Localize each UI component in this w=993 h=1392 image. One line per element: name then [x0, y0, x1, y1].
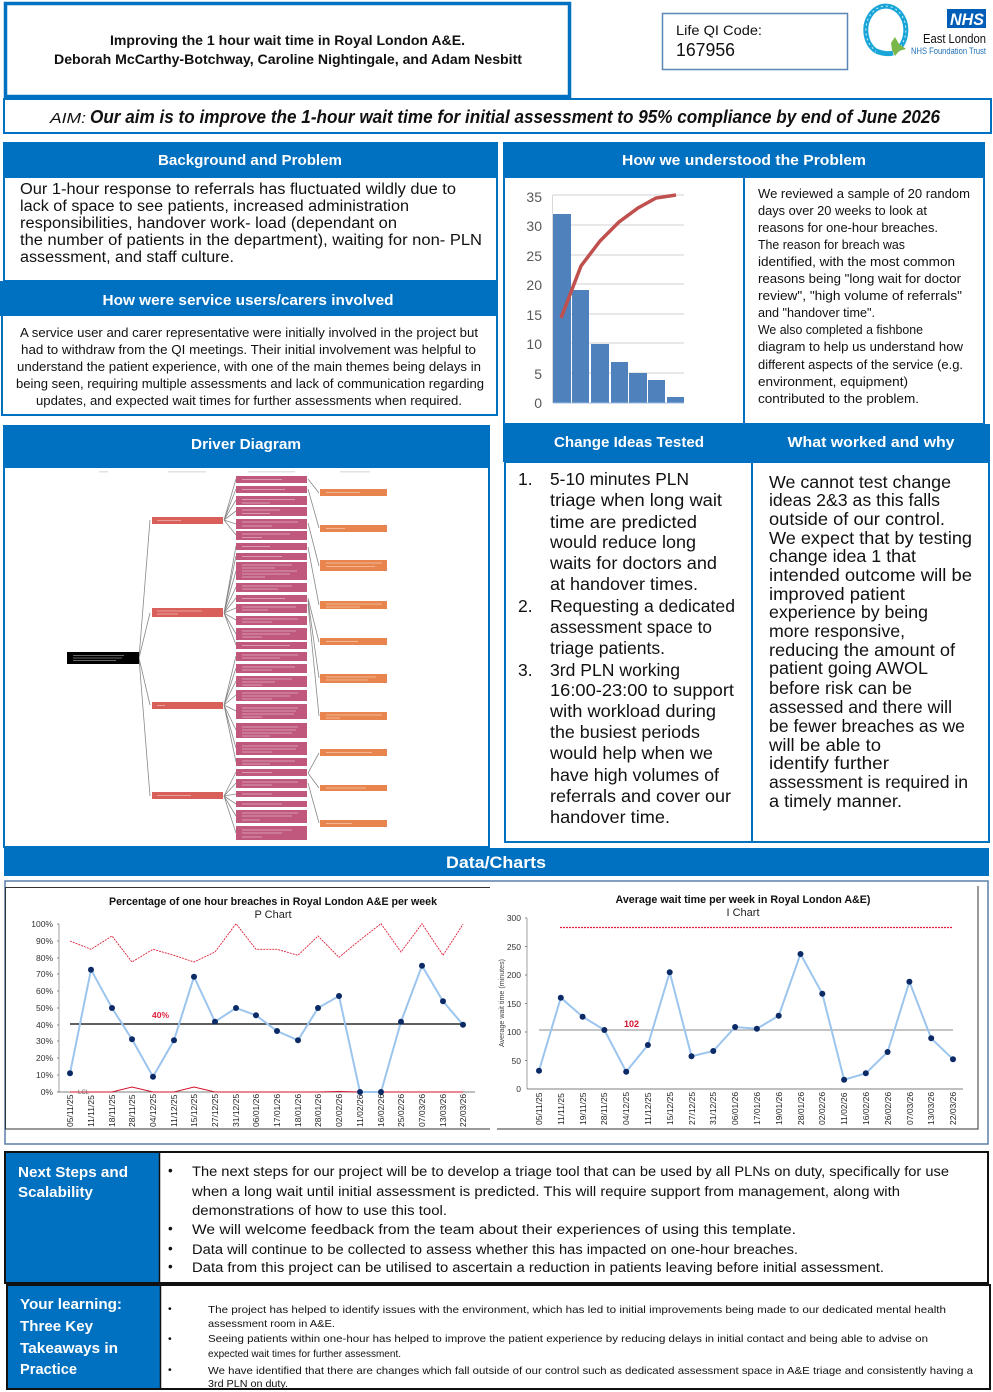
text block: what worked: ideas 2&3 as this falls	[769, 490, 940, 510]
list: change ideas	[518, 469, 735, 827]
pareto chart: 5	[534, 366, 542, 382]
text block: what worked: more responsive,	[769, 621, 905, 641]
upper control limit	[70, 924, 463, 962]
date labels: 16/02/26	[861, 1092, 871, 1125]
date labels: 26/02/26	[883, 1092, 893, 1125]
y axis: 20%	[36, 1053, 53, 1063]
bullet list: Data from this project can be utilised to ascertain a reduction in patients leaving before initial assessment.	[192, 1260, 884, 1275]
date labels: 17/01/26	[272, 1094, 282, 1127]
text block: We also completed a fishbone	[758, 323, 923, 337]
panel: background and problem	[3, 142, 498, 281]
heading	[3, 142, 498, 178]
date labels: 16/02/26	[376, 1094, 386, 1127]
date labels: 02/02/26	[334, 1094, 344, 1127]
date labels: 11/11/25	[86, 1095, 96, 1127]
panel: driver diagram	[3, 425, 490, 847]
text block: We reviewed a sample of 20 random	[758, 187, 970, 201]
pareto chart: 35	[526, 189, 542, 205]
text block: review", "high volume of referrals"	[758, 289, 962, 303]
date labels: 06/01/26	[730, 1092, 740, 1125]
headings: What worked and why	[788, 435, 954, 451]
y axis: 100%	[31, 919, 53, 929]
primary drivers	[152, 517, 223, 799]
pareto chart: 10	[526, 336, 542, 352]
text block: and "handover time".	[758, 306, 875, 320]
change ideas	[320, 489, 387, 827]
icon: NHS East London logo: NHS	[950, 10, 985, 29]
list: change ideas: triage patients.	[550, 638, 665, 658]
text block: had to withdraw from the QI meetings. Their initial involvement was helpful to	[21, 343, 476, 357]
y axis: 80%	[36, 953, 53, 963]
aim box	[67, 652, 139, 664]
date labels: 28/11/25	[599, 1092, 609, 1125]
list: change ideas: would help when we	[549, 743, 713, 763]
bullet list	[168, 1163, 949, 1275]
text block: assessment, and staff culture.	[20, 249, 234, 266]
text block: what worked: identify further	[769, 753, 889, 773]
date labels: 11/11/25	[556, 1093, 566, 1125]
pareto chart	[526, 189, 684, 411]
bullet list: The project has helped to identify issues with the environment, which has led to initial improvements being made to our dedicated mental health	[208, 1304, 946, 1316]
panel: how we understood the problem	[503, 142, 985, 424]
list: change ideas: assessment space to	[550, 617, 712, 637]
panel: Life QI code	[662, 14, 848, 70]
text block: different aspects of the service (e.g.	[758, 358, 963, 372]
panel: project title	[6, 4, 570, 96]
text block: A service user and carer representative were initially involved in the project but	[20, 326, 479, 340]
date labels: 28/01/26	[313, 1094, 323, 1127]
authors: Deborah McCarthy-Botchway, Caroline Nightingale, and Adam Nesbitt	[54, 52, 523, 67]
pareto chart: 25	[526, 248, 542, 264]
date labels: 07/03/26	[905, 1092, 915, 1125]
pareto chart: 15	[526, 307, 542, 323]
chart: I chart of average wait time: 102	[624, 1019, 639, 1029]
text block: what worked: We expect that by testing	[769, 528, 972, 548]
side heading: Your learning:	[20, 1297, 122, 1313]
text block: what worked: change idea 1 that	[769, 546, 916, 566]
y axis: 60%	[36, 986, 53, 996]
panel: your learning	[7, 1285, 990, 1390]
panel: aim: AIM:	[49, 111, 86, 127]
text block: lack of space to see patients, increased administration	[20, 198, 409, 215]
icon: quality improvement logo	[866, 6, 906, 56]
pareto chart: 0	[534, 395, 542, 411]
text block: what worked: reducing the amount of	[769, 640, 955, 660]
side heading: Scalability	[18, 1185, 93, 1201]
panel: data charts	[5, 881, 988, 1144]
panel: change ideas and what worked	[503, 424, 990, 842]
bullet list: assessment room in A&E.	[208, 1318, 335, 1330]
chart: I chart of average wait time: Average wait time per week in Royal London A&E)	[616, 894, 871, 906]
bullet list: demonstrations of how to use this tool.	[192, 1203, 447, 1218]
heading	[3, 425, 490, 468]
y axis: 50%	[36, 1003, 53, 1013]
date labels: 27/12/25	[687, 1092, 697, 1125]
date labels: 31/12/25	[708, 1092, 718, 1125]
list: change ideas: triage when long wait	[550, 490, 722, 510]
text block: understand the patient experience, with one of the main themes being delays in	[17, 360, 481, 374]
text block: what worked: before risk can be	[769, 678, 912, 698]
list: change ideas: 3rd PLN working	[550, 660, 680, 680]
headings: Change Ideas Tested	[554, 435, 704, 451]
text block: what worked: a timely manner.	[769, 791, 902, 811]
text block	[16, 326, 484, 408]
centre line	[539, 1029, 953, 1031]
bullet list: expected wait times for further assessment.	[208, 1348, 401, 1360]
chart: I chart of average wait time	[497, 886, 978, 1129]
heading: Driver Diagram	[191, 437, 301, 453]
date labels: 17/01/26	[752, 1092, 762, 1125]
bullet list: •	[168, 1259, 173, 1274]
date labels: 11/12/25	[643, 1092, 653, 1125]
y axis: 10%	[36, 1070, 53, 1080]
text block: what worked: intended outcome will be	[769, 565, 972, 585]
date labels: 25/02/26	[396, 1094, 406, 1127]
text block	[20, 181, 482, 266]
date labels: 18/01/26	[293, 1094, 303, 1127]
y axis: 30%	[36, 1036, 53, 1046]
bullet list: •	[168, 1364, 172, 1376]
text block: updates, and expected wait times for further assessments when required.	[36, 394, 462, 408]
text block: being seen, requiring multiple assessments and lack of communication regarding	[16, 377, 484, 391]
data series	[70, 966, 463, 1092]
heading	[503, 142, 985, 178]
bullet list	[168, 1303, 973, 1390]
text block	[758, 187, 970, 406]
side heading: Three Key	[20, 1319, 93, 1335]
text block: responsibilities, handover work- load (dependant on	[20, 215, 397, 232]
bullet list: The next steps for our project will be to develop a triage tool that can be used by all PLNs on duty, specifically for use	[192, 1164, 949, 1179]
text block: days over 20 weeks to look at	[758, 204, 928, 218]
text block: what worked	[768, 472, 972, 811]
chart: P chart of one hour breaches: LCL	[78, 1090, 90, 1096]
text block: identified, with the most common	[758, 255, 955, 269]
date labels: 27/12/25	[210, 1094, 220, 1127]
y axis: 0%	[41, 1087, 53, 1097]
list: change ideas: referrals and cover our	[550, 786, 731, 806]
bullet list: when a long wait until initial assessment is predicted. This will require support from management, along with	[191, 1184, 900, 1199]
headings	[503, 424, 990, 462]
date labels: 31/12/25	[231, 1094, 241, 1127]
y axis: 90%	[36, 936, 53, 946]
chart: P chart of one hour breaches: P Chart	[254, 909, 292, 921]
text block: diagram to help us understand how	[758, 340, 964, 354]
panel: aim: Our aim is to improve the 1-hour wait time for initial assessment to 95% compliance by end of June 2026	[90, 106, 941, 127]
date labels: 02/02/26	[817, 1092, 827, 1125]
connector lines	[139, 479, 319, 833]
bullet list: We will welcome feedback from the team about their experiences of using this template.	[192, 1222, 796, 1237]
icon: NHS East London logo: East London	[923, 32, 986, 46]
panel: next steps and scalability	[5, 1152, 988, 1283]
bullet list: •	[168, 1241, 173, 1256]
date labels: 11/02/26	[355, 1094, 365, 1127]
date labels	[65, 1094, 468, 1127]
list: change ideas: 16:00-23:00 to support	[550, 680, 734, 700]
side heading: Takeaways in	[20, 1341, 118, 1357]
text block: reasons being "long wait for doctor	[758, 272, 961, 286]
date labels: 06/01/26	[251, 1094, 261, 1127]
text block: what worked: will be able to	[768, 735, 881, 755]
list: change ideas: 3.	[518, 660, 533, 680]
bullet list: •	[168, 1221, 173, 1236]
list: change ideas: would reduce long	[549, 532, 696, 552]
text block: what worked: We cannot test change	[769, 472, 951, 492]
y axis: 100	[507, 1027, 521, 1037]
date labels: 13/03/26	[926, 1092, 936, 1125]
side heading: Next Steps and	[18, 1165, 128, 1181]
secondary drivers	[236, 476, 307, 840]
heading: Background and Problem	[158, 153, 342, 169]
y axis: Average wait time (minutes)	[499, 959, 506, 1047]
y axis: 150	[507, 999, 521, 1009]
list: change ideas: have high volumes of	[550, 765, 719, 785]
y axis	[499, 913, 527, 1094]
data series	[539, 954, 953, 1080]
text block: what worked: improved patient	[769, 584, 905, 604]
chart: I chart of average wait time: I Chart	[726, 907, 760, 919]
centre line	[70, 1023, 463, 1025]
title: Improving the 1 hour wait time in Royal London A&E.	[110, 33, 465, 48]
date labels: 28/01/26	[796, 1092, 806, 1125]
date labels: 15/12/25	[665, 1092, 675, 1125]
bullet list: •	[168, 1303, 172, 1315]
text block: what worked: assessed and there will	[769, 697, 952, 717]
y axis: 50	[512, 1056, 521, 1066]
text block: what worked: outside of our control.	[769, 509, 945, 529]
list: change ideas: with workload during	[549, 701, 716, 721]
heading: How were service users/carers involved	[102, 293, 394, 309]
text block: the number of patients in the department), waiting for non- PLN	[20, 232, 482, 249]
bullet list: •	[168, 1333, 172, 1345]
list: change ideas: 2.	[518, 596, 533, 616]
heading	[0, 281, 498, 316]
icon: NHS East London logo	[911, 9, 986, 56]
text block: what worked: assessment is required in	[769, 772, 968, 792]
text block: Our 1-hour response to referrals has fluctuated wildly due to	[20, 181, 456, 198]
column headings	[99, 471, 370, 472]
text block: what worked: be fewer breaches as we	[769, 716, 965, 736]
list: change ideas: 5-10 minutes PLN	[550, 469, 689, 489]
bullet list: We have identified that there are changes which fall outside of our control such as dedicated assessment space in A&E triage and consistently having a	[208, 1365, 973, 1377]
bullet list: •	[168, 1163, 173, 1178]
panel: Life QI code: 167956	[676, 39, 735, 60]
heading: data and charts	[4, 848, 989, 876]
date labels: 13/03/26	[438, 1094, 448, 1127]
date labels: 28/11/25	[127, 1094, 137, 1127]
date labels: 19/11/25	[578, 1092, 588, 1125]
y axis: 250	[507, 942, 521, 952]
upper control limit	[560, 926, 953, 928]
side heading	[6, 1153, 160, 1282]
heading: data and charts: Data/Charts	[446, 854, 546, 872]
y axis: 70%	[36, 969, 53, 979]
list: change ideas: time are predicted	[550, 512, 697, 532]
bullet list: Data will continue to be collected to assess whether this has impacted on one-hour breaches.	[192, 1242, 798, 1257]
date labels: 11/02/26	[839, 1092, 849, 1125]
bullet list: Seeing patients within one-hour has helped to improve the patient experience by reducing delays in initial contact and being able to advise on	[208, 1333, 928, 1345]
text block: The reason for breach was	[758, 238, 905, 252]
list: change ideas: Requesting a dedicated	[550, 596, 735, 616]
date labels: 22/03/26	[458, 1094, 468, 1127]
chart: P chart of one hour breaches	[6, 888, 490, 1129]
list: change ideas: handover time.	[550, 807, 670, 827]
text block: what worked: experience by being	[769, 602, 928, 622]
y axis: 0	[516, 1084, 521, 1094]
text block: what worked: patient going AWOL	[769, 658, 928, 678]
date labels: 04/12/25	[621, 1092, 631, 1125]
date labels: 11/12/25	[169, 1094, 179, 1127]
panel: aim	[4, 99, 991, 133]
date labels: 04/12/25	[148, 1094, 158, 1127]
chart: P chart of one hour breaches: 40%	[152, 1010, 169, 1020]
y axis	[31, 919, 59, 1097]
date labels: 05/11/25	[534, 1092, 544, 1125]
date labels	[534, 1092, 958, 1125]
pareto chart: 30	[526, 218, 542, 234]
list: change ideas: 1.	[518, 469, 533, 489]
text block: contributed to the problem.	[758, 392, 919, 406]
date labels: 18/11/25	[107, 1094, 117, 1127]
date labels: 19/01/26	[774, 1092, 784, 1125]
y axis: 40%	[36, 1020, 53, 1030]
panel: Life QI code: Life QI Code:	[676, 22, 762, 38]
side heading	[8, 1286, 160, 1388]
bullet list: 3rd PLN on duty.	[208, 1378, 288, 1390]
text block: environment, equipment)	[758, 375, 908, 389]
panel: service users and carers	[0, 281, 498, 415]
date labels: 05/11/25	[65, 1094, 75, 1127]
side heading: Practice	[20, 1362, 77, 1378]
list: change ideas: at handover times.	[550, 574, 698, 594]
text block: reasons for one-hour breaches.	[758, 221, 938, 235]
pareto chart: 20	[526, 277, 542, 293]
list: change ideas: waits for doctors and	[549, 553, 717, 573]
lower control limit	[70, 1087, 463, 1092]
heading: How we understood the Problem	[622, 153, 866, 169]
list: change ideas: the busiest periods	[550, 722, 700, 742]
date labels: 15/12/25	[189, 1094, 199, 1127]
date labels: 07/03/26	[417, 1094, 427, 1127]
date labels: 22/03/26	[948, 1092, 958, 1125]
chart: P chart of one hour breaches: Percentage of one hour breaches in Royal London A&E per week	[109, 896, 438, 908]
y axis: 300	[507, 913, 521, 923]
y axis: 200	[507, 970, 521, 980]
